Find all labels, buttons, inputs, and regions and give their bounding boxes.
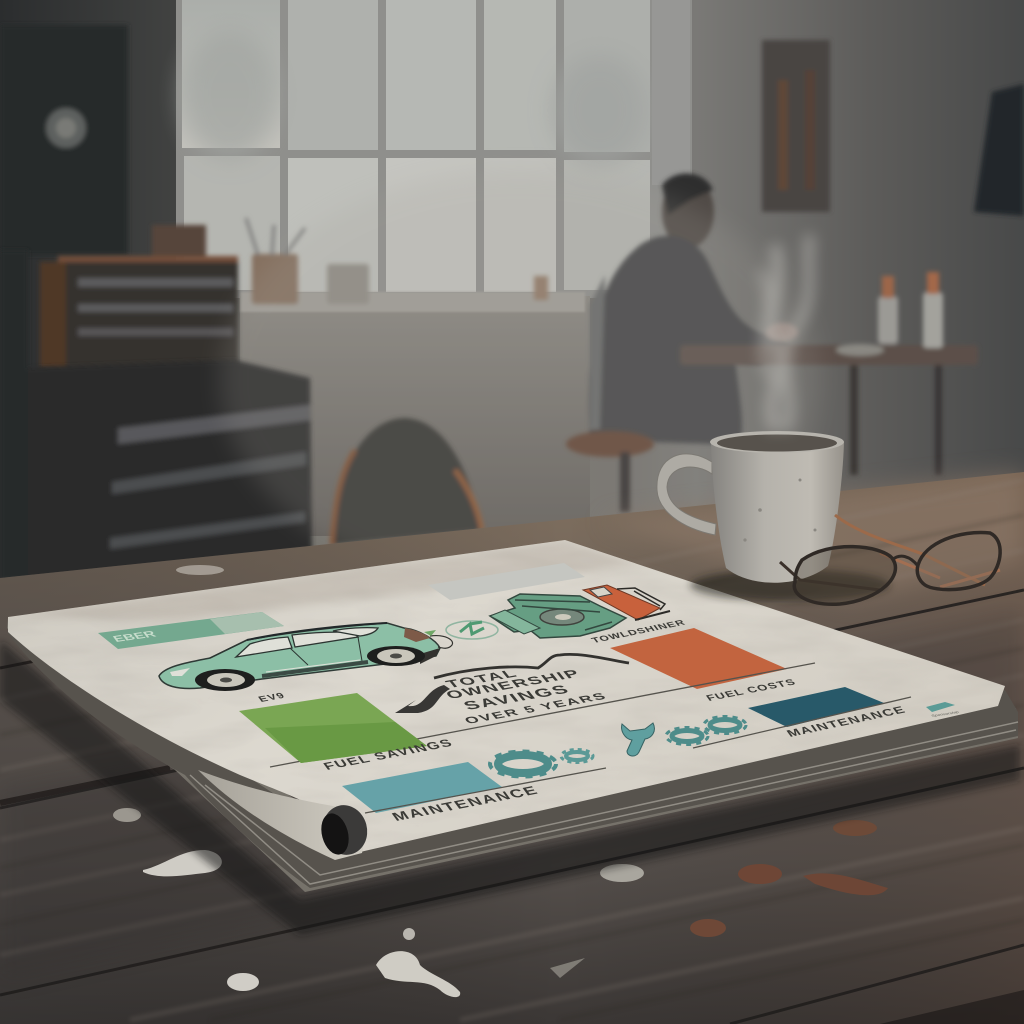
page curl roll — [198, 770, 373, 860]
icon: fuel pump — [583, 585, 670, 620]
label: maintenance left: MAINTENANCE — [389, 784, 542, 824]
stacked paper shadow — [0, 640, 1020, 935]
wall below the window — [240, 296, 590, 536]
icon: paired gears — [666, 716, 746, 744]
stool — [566, 431, 654, 512]
icon: combustion engine — [490, 594, 626, 638]
background table with bottles — [680, 272, 978, 475]
dark left shelf with wall clock — [0, 25, 206, 260]
title: total ownership savings: SAVINGS — [460, 682, 573, 712]
label: fuel savings: FUEL SAVINGS — [321, 737, 456, 772]
bar: green fuel savings — [239, 693, 427, 763]
foreground vignette — [880, 990, 1024, 1024]
eyeglasses — [780, 515, 1000, 604]
front wheel — [195, 669, 255, 691]
illustration: electric SUV — [159, 623, 453, 691]
title: total ownership savings: TOTAL — [443, 667, 521, 690]
white and brown paint splatters — [113, 565, 888, 997]
title: total ownership savings — [395, 654, 629, 726]
mug shadow on table — [690, 569, 890, 601]
baseline rule lower right — [693, 697, 911, 748]
label: EV9: EV9 — [256, 691, 288, 704]
title: total ownership savings: OWNERSHIP — [443, 667, 584, 701]
tool cabinet — [0, 250, 312, 580]
seated person, blurred — [589, 174, 798, 445]
label: TOWLESHNER: TOWLDSHINER — [590, 619, 688, 645]
icon: large gear — [490, 752, 556, 776]
baseline rule lower left — [365, 768, 606, 813]
wall pictures — [762, 40, 1024, 216]
rear wheel — [367, 646, 425, 666]
background: workshop wall — [0, 0, 1024, 600]
bar: navy maintenance right — [748, 687, 884, 727]
header badge: grey blank — [428, 563, 585, 600]
room haze — [220, 170, 820, 590]
icon: circular charge badge — [446, 621, 498, 639]
title: total ownership savings: OVER 5 YEARS — [462, 690, 610, 726]
stack of papers beneath — [7, 618, 1018, 892]
paper lower edge pages — [8, 620, 1018, 888]
sill objects: pots and jars — [246, 218, 548, 304]
icon: small gear — [561, 750, 593, 762]
bar: orange fuel costs — [610, 628, 787, 689]
small logo: Sponsorship — [931, 710, 960, 718]
toolbox top — [40, 256, 238, 370]
label: maintenance right: MAINTENANCE — [784, 704, 908, 739]
wooden table — [0, 472, 1024, 1024]
label: fuel costs: FUEL COSTS — [704, 678, 799, 703]
coffee mug — [657, 431, 844, 583]
chair back — [332, 418, 482, 545]
infographic sheet — [0, 530, 1024, 860]
window sill — [240, 292, 585, 312]
header badge: green — [98, 612, 284, 649]
steam — [760, 235, 810, 430]
bar: blue maintenance left — [342, 762, 502, 813]
icon: wrench — [622, 723, 654, 756]
header badge: green: EBER — [110, 628, 158, 644]
baseline rule upper — [270, 663, 815, 767]
small logo — [926, 702, 960, 718]
window with foggy panes — [176, 0, 692, 298]
